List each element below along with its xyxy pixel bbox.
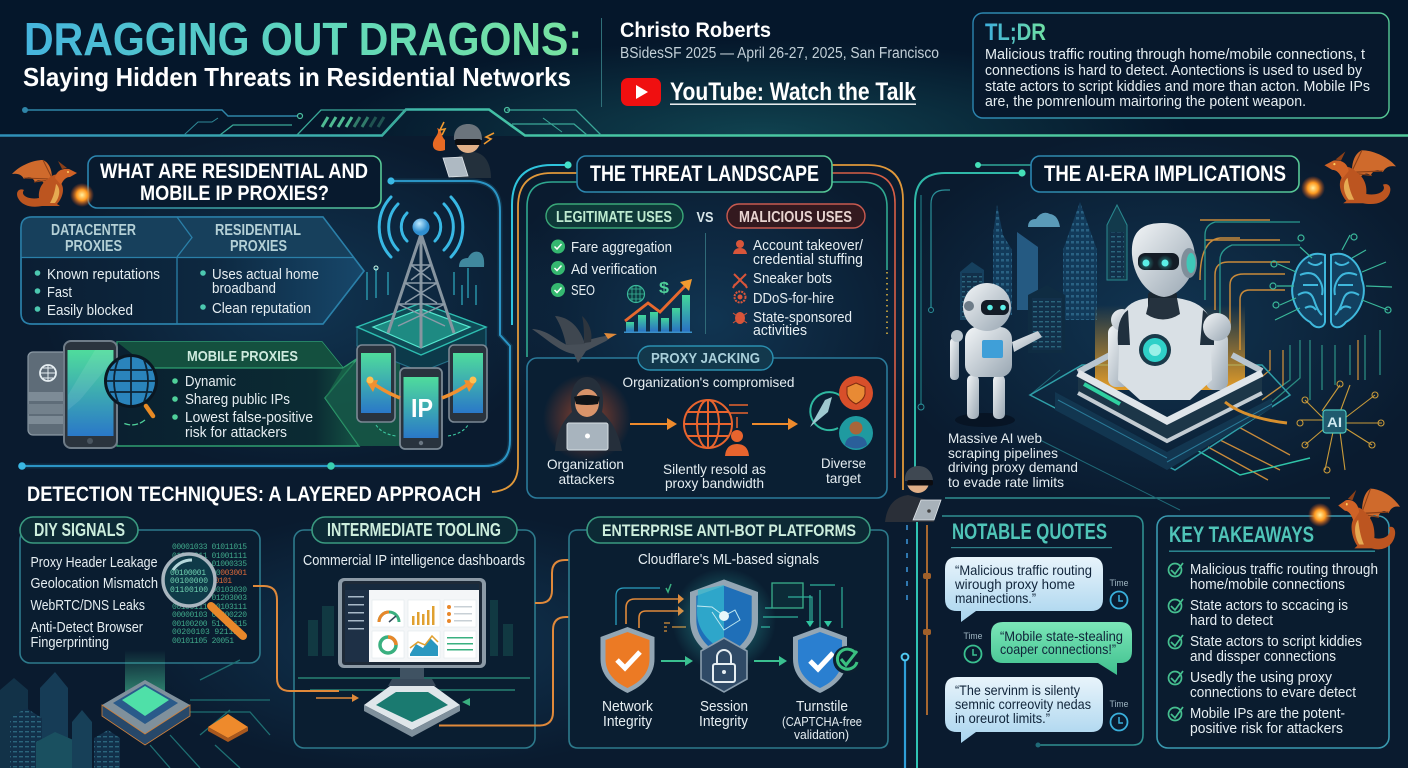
icon: IP phones [357, 345, 487, 449]
panel: TL;DR: TL;DR [985, 19, 1046, 46]
arrowheads [352, 555, 620, 706]
panel: key takeaways [1157, 516, 1389, 748]
label: network integrity [602, 699, 654, 730]
illustration: platform [1078, 373, 1287, 443]
residential column: PROXIES [230, 238, 287, 255]
speaker info: Christo Roberts [620, 19, 771, 42]
legitimate uses: Fare aggregation [571, 240, 672, 256]
title [23, 13, 582, 92]
quote 3: “The servinm is silenty [955, 682, 1080, 698]
residential column: Clean reputation [212, 301, 311, 317]
datacenter column: DATACENTER [51, 222, 136, 239]
panel: DIY signals: Proxy Header Leakage [30, 555, 158, 571]
icon: magnifier [163, 554, 243, 636]
label: resold as proxy bandwidth: Silently resold as [663, 461, 766, 477]
quote 2: coaper connections!” [1000, 641, 1116, 657]
panel: TL;DR [973, 13, 1389, 118]
label: organization attackers [547, 456, 624, 487]
binary data [172, 543, 247, 646]
chart: growth bars: $ [659, 280, 669, 297]
takeaway list [1190, 562, 1378, 737]
binary data: 10000101 00003001 [172, 569, 247, 578]
panel: notable quotes [942, 516, 1143, 748]
residential column: Uses actual home [212, 267, 319, 283]
check icons [1168, 563, 1183, 720]
binary data: 00001033 01011015 [172, 543, 247, 552]
panel: mobile proxies: Lowest false-positive [185, 410, 313, 426]
residential column: RESIDENTIAL [215, 222, 301, 239]
legitimate uses: SEO [571, 283, 595, 299]
panel: DIY signals: WebRTC/DNS Leaks [30, 598, 145, 614]
label: resold as proxy bandwidth [663, 461, 766, 491]
clock 3: Time [1110, 699, 1128, 710]
datacenter column: Known reputations [47, 267, 160, 283]
icon: IP phones: IP [411, 393, 433, 423]
takeaway list: Malicious traffic routing through [1190, 562, 1378, 578]
panel: datacenter vs residential comparison [21, 217, 364, 324]
panel: enterprise anti-bot [569, 517, 888, 748]
panel: DIY signals: Anti-Detect Browser [30, 620, 143, 636]
quote 3: semnic correovity nedas [955, 696, 1091, 712]
malicious uses: DDoS-for-hire [753, 291, 834, 307]
icon: magnifier: 01100100 [170, 586, 208, 595]
takeaway list: Usedly the using proxy [1190, 670, 1333, 686]
threat section connectors [492, 161, 903, 492]
illustration: large robot [1108, 223, 1231, 400]
label: turnstile: Turnstile [796, 699, 848, 715]
icon: monitor dashboard [338, 578, 486, 737]
illustration: server base [1030, 365, 1290, 470]
icon: hooded attacker [543, 374, 631, 462]
panel: enterprise anti-bot: Cloudflare's ML-based signals [638, 552, 819, 568]
binary data: 01000101 01000335 [172, 560, 247, 569]
icon: AI chip network [1297, 381, 1384, 473]
residential column: broadband [212, 281, 276, 297]
heading: AI-era [1031, 156, 1299, 192]
icon: diverse targets [810, 376, 873, 450]
illustration: robot glow [1078, 305, 1262, 390]
label: session integrity: Integrity [699, 714, 749, 730]
quote 2: “Mobile state-stealing [1000, 628, 1123, 644]
orange connectors [253, 560, 612, 726]
icon: dragon top-right [1301, 150, 1396, 204]
residential column [200, 222, 319, 317]
panel: DIY signals: Fingerprinting [30, 635, 109, 651]
heading: residential and mobile: WHAT ARE RESIDENTIAL AND [100, 160, 368, 183]
title: DRAGGING OUT DRAGONS: [24, 13, 582, 65]
panel: TL;DR: are, the pomrenloum mairtoring the potent weapon. [985, 94, 1306, 110]
datacenter column: Fast [47, 285, 72, 301]
chart: growth bars [624, 279, 692, 333]
left section connector [18, 177, 510, 470]
clock 2 [964, 631, 982, 662]
speaker info [620, 19, 939, 62]
panel: TL;DR: Malicious traffic routing through home/mobile connections, t [985, 47, 1365, 63]
malicious uses: Account takeover/ [753, 238, 864, 254]
panel: intermediate tooling: INTERMEDIATE TOOLING [327, 520, 501, 540]
takeaway list: hard to detect [1190, 613, 1273, 629]
quote 1: wirough proxy home [954, 576, 1075, 592]
panel: proxy jacking: Organization's compromised [622, 374, 794, 390]
quote 3 [945, 677, 1103, 743]
panel: enterprise anti-bot: ENTERPRISE ANTI-BOT PLATFORMS [602, 521, 856, 540]
malicious uses [705, 204, 865, 339]
quote 2 [991, 622, 1132, 675]
icon: hacker top [433, 122, 494, 178]
illustration: circuits [1030, 220, 1380, 510]
binary data: 00100200 51.10115 [172, 620, 247, 629]
legitimate uses: LEGITIMATE USES [556, 209, 672, 226]
icon: magnifier: 00100000 [170, 577, 208, 586]
panel: mobile proxies: Shareg public IPs [185, 392, 290, 408]
icon: orange globe [684, 400, 749, 456]
speaker info: BSidesSF 2025 — April 26-27, 2025, San Francisco [620, 45, 939, 62]
legitimate uses: Ad verification [571, 262, 657, 278]
icon: central shield [672, 568, 776, 672]
panel: intermediate tooling: Commercial IP intelligence dashboards [303, 553, 525, 569]
arrows between shields [661, 656, 787, 666]
panel: DIY signals: Geolocation Mismatch [30, 576, 158, 592]
heading: detection techniques: DETECTION TECHNIQUES: A LAYERED APPROACH [27, 483, 481, 506]
label: session integrity: Session [700, 699, 748, 715]
panel: TL;DR: connections is hard to detect. Aontections is used to used by [985, 63, 1363, 79]
panel: mobile proxies: Dynamic [185, 374, 236, 390]
malicious uses: activities [753, 323, 807, 339]
panel: proxy jacking: PROXY JACKING [651, 350, 760, 367]
label: diverse target: target [826, 470, 861, 486]
panel: DIY signals: DIY SIGNALS [34, 520, 125, 540]
quote 3: in oreurot limits.” [955, 710, 1050, 726]
icon: lock hexagon [701, 638, 747, 692]
malicious uses: credential stuffing [753, 252, 863, 268]
legitimate uses [546, 204, 683, 299]
takeaway list: State actors to sccacing is [1190, 598, 1348, 614]
label: turnstile [782, 699, 862, 742]
panel: TL;DR: state actors to script kiddies and more than acton. Mobile IPs [985, 79, 1370, 95]
text: AI demand caption: scraping pipelines [948, 445, 1058, 461]
text: AI demand caption: driving proxy demand [948, 459, 1078, 475]
clock 1: Time [1110, 578, 1128, 589]
icon: network integrity shield [600, 627, 654, 693]
panel: threat landscape: THE THREAT LANDSCAPE [590, 161, 819, 186]
text: AI demand caption [948, 430, 1078, 490]
icon: youtube [621, 78, 661, 106]
malicious uses: State-sponsored [753, 310, 852, 326]
takeaway list: positive risk for attackers [1190, 721, 1343, 737]
takeaway list: connections to evare detect [1190, 685, 1356, 701]
clock 2: Time [964, 631, 982, 642]
clock 3 [1110, 699, 1128, 730]
binary data: 00000101 01203003 [172, 594, 247, 603]
panel: mobile proxies [117, 342, 400, 446]
malicious uses: Sneaker bots [753, 271, 832, 287]
icon: hacker center [885, 466, 941, 522]
arrow: proxy to target [752, 418, 798, 430]
label: organization attackers: attackers [558, 471, 614, 487]
versus label: VS [696, 209, 714, 226]
panel: threat landscape [546, 156, 865, 339]
AI section connectors and central lines [902, 162, 1330, 768]
takeaway list: home/mobile connections [1190, 577, 1345, 593]
panel: mobile proxies: risk for attackers [185, 425, 287, 441]
text: AI demand caption: Massive AI web [948, 430, 1042, 446]
illustration: bottom-left chip and buildings [0, 650, 270, 768]
binary data: 00200103 92111 [172, 628, 238, 637]
panel: DIY signals [20, 517, 260, 663]
illustration: background skyline [308, 600, 513, 656]
icon: cell tower [357, 197, 486, 372]
icon: dark dragon [532, 316, 617, 363]
binary data: 01001011 01001111 [172, 552, 247, 561]
quote 1: “Malicious traffic routing [955, 562, 1092, 578]
panel: proxy jacking [527, 346, 887, 498]
label: turnstile: validation) [794, 727, 849, 742]
label: diverse target: Diverse [821, 455, 866, 471]
binary data: 00100111 00103111 [172, 603, 247, 612]
header divider [601, 18, 602, 107]
background [104, 67, 1374, 724]
malicious uses: MALICIOUS USES [739, 209, 852, 226]
icon: phones with globe [28, 341, 158, 448]
icon: dragon bottom-right [1308, 489, 1400, 549]
datacenter column [35, 222, 160, 319]
label: turnstile: (CAPTCHA-free [782, 714, 862, 729]
icon: turnstile shield [793, 627, 861, 693]
icon: dragon top-left [12, 160, 77, 207]
panel: intermediate tooling [294, 517, 535, 748]
illustration: small robot [950, 283, 1042, 427]
heading: residential and mobile: MOBILE IP PROXIES? [140, 182, 329, 205]
label: organization attackers: Organization [547, 456, 624, 472]
heading: AI-era: THE AI-ERA IMPLICATIONS [1044, 161, 1286, 186]
label: network integrity: Integrity [603, 714, 653, 730]
label: resold as proxy bandwidth: proxy bandwidth [665, 475, 764, 491]
label: network integrity: Network [602, 699, 654, 715]
quote 1: maninections.” [955, 590, 1036, 606]
arrow: attacker to proxy [630, 418, 677, 430]
datacenter column: Easily blocked [47, 303, 133, 319]
icon: brain [1270, 234, 1392, 327]
icon: magnifier: 00100001 [170, 569, 206, 578]
header circuit line [0, 107, 1408, 136]
heading: residential and mobile [70, 156, 381, 208]
binary data: 00100000 00101 [172, 577, 232, 586]
datacenter column: PROXIES [65, 238, 122, 255]
illustration: city skyline [960, 202, 1127, 353]
youtube link: YouTube: Watch the Talk [670, 78, 916, 106]
icon: AI chip network: AI [1327, 414, 1342, 430]
panel: mobile proxies: MOBILE PROXIES [187, 348, 298, 365]
binary data: 00000103 01000220 [172, 611, 247, 620]
label: diverse target [821, 455, 866, 486]
quote 1 [945, 557, 1103, 622]
label: session integrity [699, 699, 749, 730]
text: AI demand caption: to evade rate limits [948, 474, 1064, 490]
takeaway list: State actors to script kiddies [1190, 634, 1362, 650]
takeaway list: and dissper connections [1190, 649, 1336, 665]
signal lines [616, 583, 842, 631]
takeaway list: Mobile IPs are the potent- [1190, 706, 1345, 722]
title: Slaying Hidden Threats in Residential Networks [23, 62, 571, 92]
panel: notable quotes: NOTABLE QUOTES [952, 519, 1107, 544]
clock 1 [1110, 578, 1128, 608]
panel: key takeaways: KEY TAKEAWAYS [1169, 522, 1314, 547]
binary data: 01100100 00103030 [172, 586, 247, 595]
binary data: 00101105 20051 [172, 637, 234, 646]
